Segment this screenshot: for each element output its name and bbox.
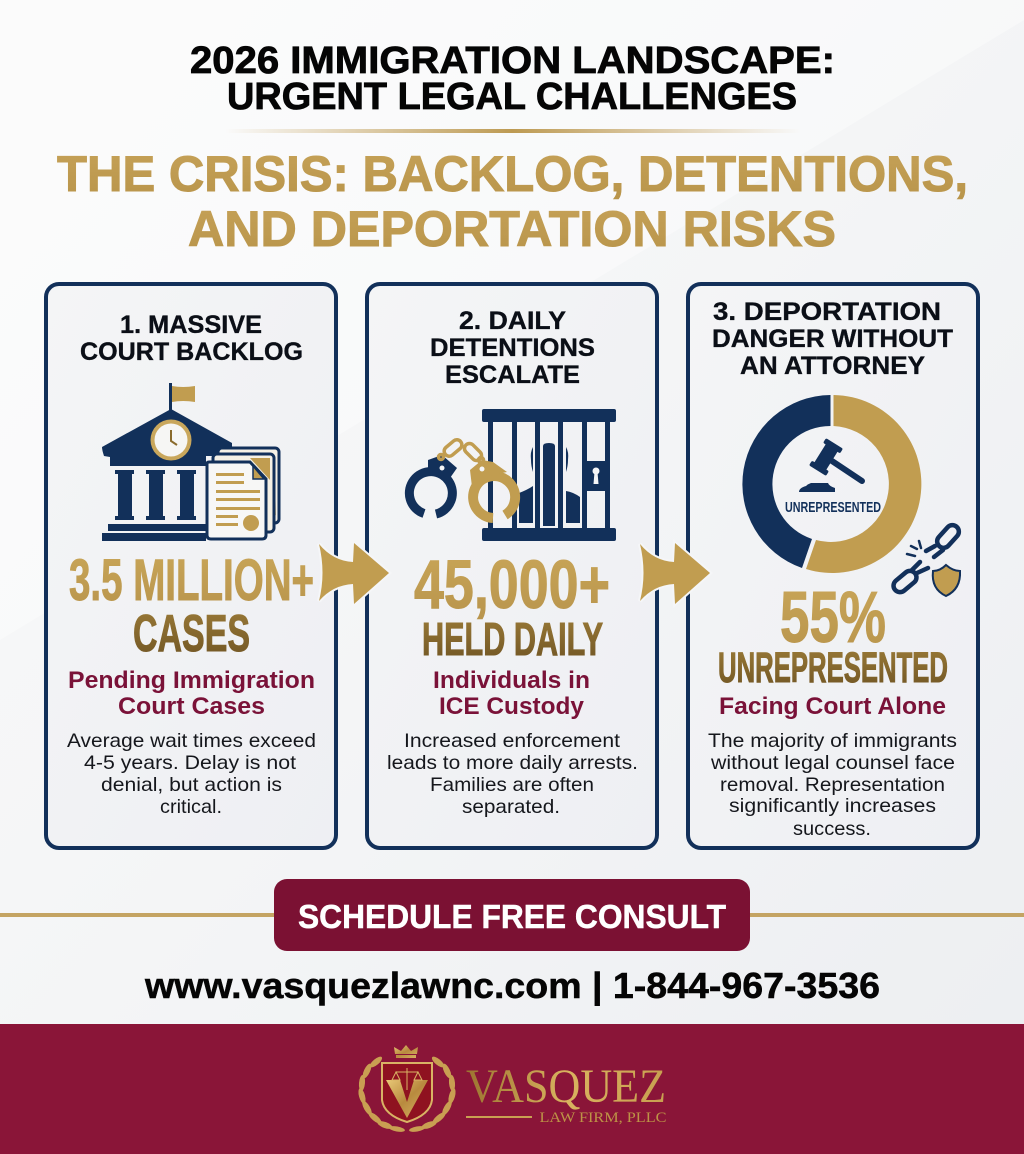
stat: 45,000+ held daily: 45,000+ [414, 546, 610, 623]
panel heading: massive court backlog: 1. MASSIVE [120, 311, 262, 339]
heading: AND DEPORTATION RISKS [188, 201, 836, 257]
arrow: panel 1 to panel 2 [319, 543, 389, 604]
icon: courthouse with documents [102, 383, 279, 541]
icon: broken chain and shield [891, 522, 962, 596]
text: representation: significantly increases [729, 795, 936, 817]
panel heading: daily detentions escalate [430, 307, 595, 389]
panel heading: deportation danger: DANGER WITHOUT [712, 325, 953, 353]
text: wait times [67, 730, 316, 818]
stat: 55% unrepresented [718, 578, 948, 692]
heading [57, 146, 968, 257]
chart: donut 55 percent unrepresented: UNREPRESENTED [785, 499, 881, 516]
text: representation: removal. Representation [720, 774, 945, 796]
panel heading: deportation danger [712, 298, 953, 380]
icon: shield with scales [382, 1063, 432, 1122]
button: schedule free consult: SCHEDULE FREE CONSULT [298, 898, 726, 935]
subheading: pending cases: Court Cases [118, 693, 265, 720]
text: representation [708, 730, 957, 840]
panel heading: daily detentions escalate: ESCALATE [445, 361, 580, 389]
logo: vasquez law firm: LAW FIRM, PLLC [540, 1110, 666, 1126]
logo: vasquez law firm [357, 1045, 666, 1133]
icon: laurel wreath [357, 1055, 457, 1133]
button: schedule free consult [274, 879, 750, 951]
text: representation: The majority of immigrants [708, 730, 957, 752]
text: representation: without legal counsel face [710, 752, 955, 774]
subheading: facing court alone: Facing Court Alone [719, 693, 946, 720]
panel heading: massive court backlog: COURT BACKLOG [80, 338, 303, 366]
title: URGENT LEGAL CHALLENGES [227, 76, 797, 118]
text: enforcement [387, 730, 638, 818]
stat: 3.5 million+ cases: 3.5 MILLION+ [69, 548, 314, 613]
stat: 3.5 million+ cases [69, 548, 314, 663]
panel: deportation danger [688, 284, 978, 848]
stat: 55% unrepresented: 55% [780, 578, 886, 658]
text: wait times: 4-5 years. Delay is not [84, 752, 297, 774]
text: enforcement: separated. [462, 796, 560, 818]
text: representation: success. [793, 818, 871, 840]
panel: court backlog [46, 284, 336, 848]
text: wait times: critical. [160, 796, 222, 818]
contact line: www.vasquezlawnc.com | 1-844-967-3536 [144, 965, 880, 1007]
panel heading: deportation danger: 3. DEPORTATION [713, 298, 941, 326]
text: enforcement: Families are often [430, 774, 594, 796]
footer band [0, 1024, 1024, 1154]
panel heading: daily detentions escalate: DETENTIONS [430, 334, 595, 362]
icon: jail cell and handcuffs [409, 409, 616, 541]
icon: crown [394, 1045, 418, 1058]
icon: gavel [799, 438, 862, 492]
subheading: ice custody [433, 667, 590, 720]
logo: vasquez law firm: VASQUEZ [466, 1060, 666, 1113]
heading: THE CRISIS: BACKLOG, DETENTIONS, [57, 146, 968, 202]
panel heading: deportation danger: AN ATTORNEY [740, 352, 925, 380]
title: 2026 IMMIGRATION LANDSCAPE: [190, 40, 835, 82]
text: wait times: Average wait times exceed [67, 730, 316, 752]
subheading: ice custody: ICE Custody [439, 693, 584, 720]
stat: 45,000+ held daily: HELD DAILY [422, 613, 603, 665]
title [190, 40, 835, 118]
panel heading: daily detentions escalate: 2. DAILY [459, 307, 566, 335]
arrow: panel 2 to panel 3 [640, 543, 710, 604]
text: enforcement: Increased enforcement [404, 730, 621, 752]
panel heading: massive court backlog [80, 311, 303, 366]
subheading: pending cases: Pending Immigration [68, 667, 315, 694]
text: enforcement: leads to more daily arrests. [387, 752, 638, 774]
text: wait times: denial, but action is [101, 774, 282, 796]
stat: 45,000+ held daily [414, 546, 610, 665]
subheading: ice custody: Individuals in [433, 667, 590, 694]
subheading: pending cases [68, 667, 315, 720]
chart: donut 55 percent unrepresented [742, 395, 921, 573]
panel: daily detentions [367, 284, 657, 848]
stat: 3.5 million+ cases: CASES [133, 605, 250, 663]
